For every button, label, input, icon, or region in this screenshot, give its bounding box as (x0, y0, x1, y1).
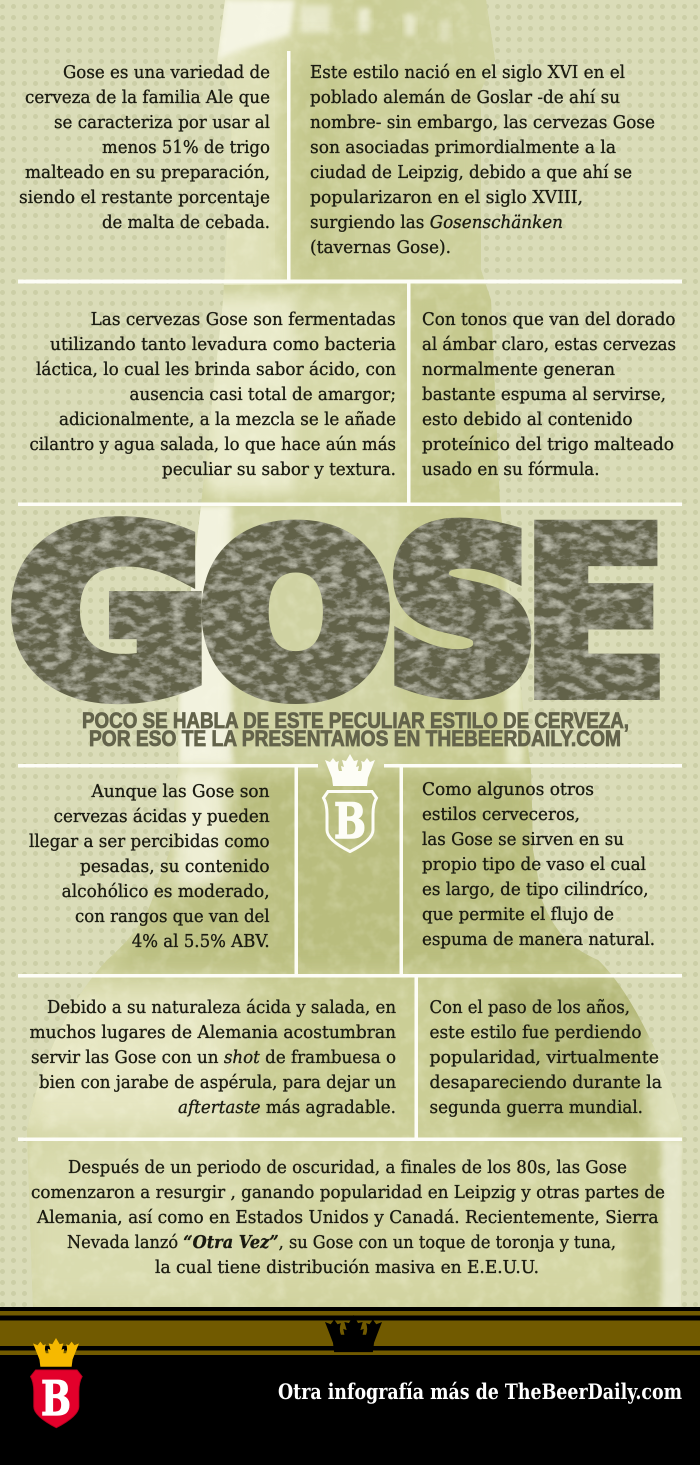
text panel: origin: Este estilo nació en el siglo XVI en el (310, 62, 625, 83)
text panel: origin: (tavernas Gose). (310, 237, 451, 258)
icon: white crown and shield logo: B (334, 792, 366, 850)
text panel: origin: surgiendo las Gosenschänken (310, 212, 563, 233)
text panel: origin: son asociadas primordialmente a la (310, 137, 616, 158)
text panel: alcohol: alcohólico es moderado, (62, 881, 270, 902)
text panel: glass (422, 779, 655, 950)
text panel: origin (310, 62, 655, 258)
text panel: colour: usado en su fórmula. (422, 459, 600, 480)
text panel: alcohol: pesadas, su contenido (80, 856, 270, 877)
text panel: revival: comenzaron a resurgir , ganando popularidad en Leipzig y otras partes de (31, 1182, 665, 1203)
text panel: intro: malteado en su preparación, (25, 162, 270, 183)
text panel: alcohol: Aunque las Gose son (91, 781, 270, 802)
text panel: fermentation: utilizando tanto levadura como bacteria (50, 334, 396, 355)
text panel: fermentation: Las cervezas Gose son fermentadas (91, 309, 396, 330)
text panel: alcohol: cervezas ácidas y pueden (54, 806, 270, 827)
title: GOSE: O (203, 492, 389, 739)
title: GOSE: E (521, 483, 669, 747)
text panel: origin: nombre- sin embargo, las cervezas Gose (310, 112, 655, 133)
text panel: intro: cerveza de la familia Ale que (25, 87, 270, 108)
text panel: serving: aftertaste más agradable. (178, 1097, 396, 1118)
text panel: glass: propio tipo de vaso el cual (422, 854, 646, 875)
text panel: glass: es largo, de tipo cilindríco, (422, 879, 649, 900)
text panel: revival: Alemania, así como en Estados Unidos y Canadá. Recientemente, Sierra (36, 1207, 659, 1228)
text panel: glass: Como algunos otros (422, 779, 594, 800)
text panel: origin: ciudad de Leipzig, debido a que ahí se (310, 162, 632, 183)
text panel: fermentation: ausencia casi total de amargor; (130, 384, 396, 405)
text panel: colour: Con tonos que van del dorado (422, 309, 676, 330)
rules between text panels (18, 51, 682, 1141)
text panel: revival (31, 1157, 665, 1278)
text panel: glass: las Gose se sirven en su (422, 829, 624, 850)
text panel: revival: Después de un periodo de oscuridad, a finales de los 80s, las Gose (68, 1157, 627, 1178)
subtitle: POR ESO TE LA PRESENTAMOS EN THEBEERDAILY.COM (89, 726, 621, 751)
text panel: fermentation: cilantro y agua salada, lo que hace aún más (30, 434, 396, 455)
text panel: alcohol: llegar a ser percibidas como (29, 831, 270, 852)
text panel: decline: segunda guerra mundial. (430, 1097, 643, 1118)
text panel: colour: bastante espuma al servirse, (422, 384, 666, 405)
title: GOSE: S (389, 490, 536, 737)
text panel: fermentation: peculiar su sabor y textura. (162, 459, 396, 480)
text panel: intro: menos 51% de trigo (102, 137, 270, 158)
title: GOSE (10, 483, 669, 747)
text panel: intro (19, 62, 270, 233)
text panel: colour: al ámbar claro, estas cervezas (422, 334, 676, 355)
icon: red shield logo with gold crown: B (41, 1371, 71, 1427)
text panel: decline (430, 997, 662, 1118)
text panel: serving: bien con jarabe de aspérula, para dejar un (39, 1072, 396, 1093)
text panel: glass: estilos cerveceros, (422, 804, 580, 825)
cap highlights (217, 0, 450, 60)
text panel: fermentation (30, 309, 396, 480)
title: GOSE: G (10, 484, 209, 744)
text panel: intro: se caracteriza por usar al (54, 112, 270, 133)
icon: black crown (325, 1315, 382, 1352)
text panel: intro: de malta de cebada. (102, 212, 270, 233)
text panel: origin: popularizaron en el siglo XVIII, (310, 187, 583, 208)
text panel: intro: Gose es una variedad de (63, 62, 270, 83)
text panel: intro: siendo el restante porcentaje (19, 187, 270, 208)
text panel: serving (30, 997, 396, 1118)
footer band (0, 1307, 700, 1465)
icon: white crown and shield logo (324, 754, 376, 852)
text panel: fermentation: láctica, lo cual les brinda sabor ácido, con (36, 359, 396, 380)
text panel: colour: esto debido al contenido (422, 409, 633, 430)
text panel: colour (422, 309, 676, 480)
text panel: colour: normalmente generan (422, 359, 615, 380)
icon: red shield logo with gold crown (30, 1338, 82, 1428)
text panel: alcohol: con rangos que van del (75, 906, 270, 927)
text panel: alcohol: 4% al 5.5% ABV. (132, 931, 270, 952)
text panel: decline: este estilo fue perdiendo (430, 1022, 642, 1043)
text panel: glass: que permite el flujo de (422, 904, 614, 925)
subtitle (82, 708, 629, 751)
text panel: serving: Debido a su naturaleza ácida y salada, en (47, 997, 396, 1018)
text panel: decline: popularidad, virtualmente (430, 1047, 659, 1068)
text panel: origin: poblado alemán de Goslar -de ahí su (310, 87, 620, 108)
text panel: glass: espuma de manera natural. (422, 929, 655, 950)
text panel: revival: Nevada lanzó “Otra Vez”, su Gose con un toque de toronja y tuna, (67, 1232, 616, 1253)
text panel: alcohol (29, 781, 270, 952)
text panel: fermentation: adicionalmente, a la mezcla se le añade (59, 409, 396, 430)
text panel: decline: Con el paso de los años, (430, 997, 630, 1018)
text panel: colour: proteínico del trigo malteado (422, 434, 674, 455)
text panel: decline: desapareciendo durante la (430, 1072, 662, 1093)
text panel: serving: muchos lugares de Alemania acostumbran (30, 1022, 396, 1043)
text panel: serving: servir las Gose con un shot de frambuesa o (31, 1047, 396, 1068)
text panel: revival: la cual tiene distribución masiva en E.E.U.U. (155, 1257, 539, 1278)
